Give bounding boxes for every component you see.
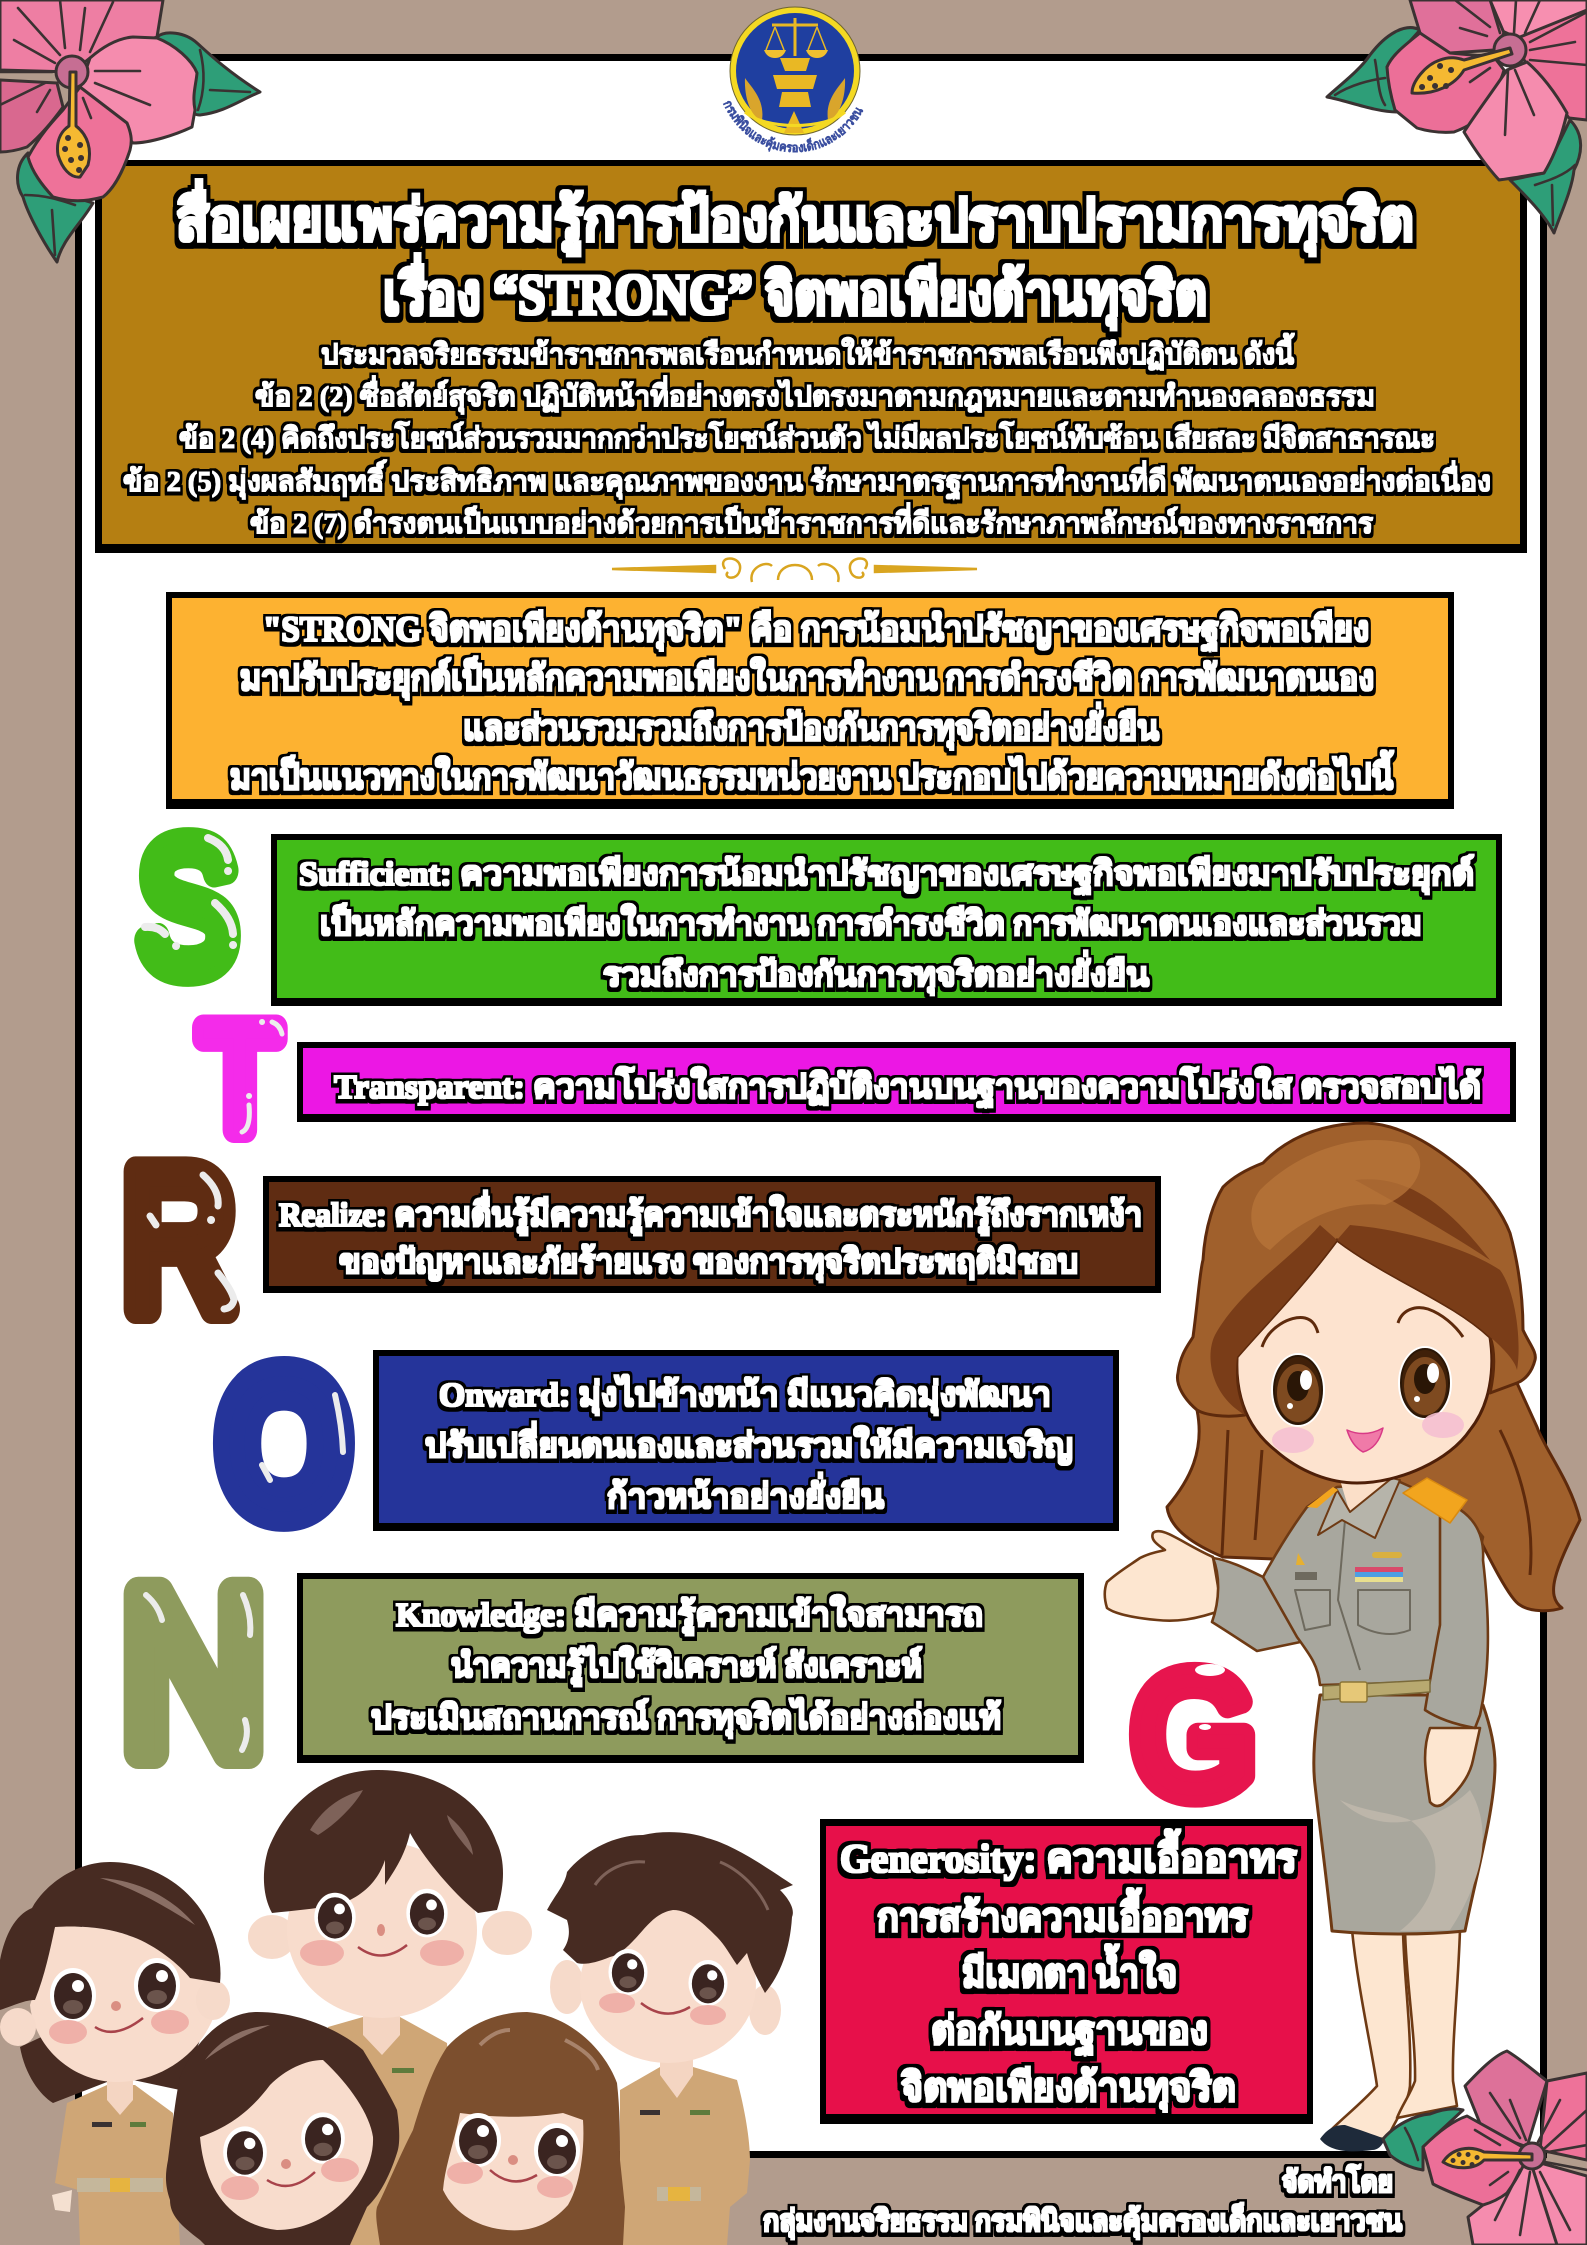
letter N: N: [122, 1544, 265, 1801]
panel: Generosity: การสร้างความเอื้ออาทร: [877, 1888, 1248, 1940]
cheeks: [1272, 1427, 1314, 1453]
panel: Generosity: มีเมตตา น้ำใจ: [962, 1944, 1177, 1996]
collar: [1318, 1478, 1400, 1538]
code of ethics text: ข้อ 2 (5) มุ่งผลสัมฤทธิ์ ประสิทธิภาพ และคุณภาพของงาน รักษามาตรฐานการทำงานที่ดี พัฒนาตนเองอย่างต่อเนื่อง: [123, 459, 1491, 500]
code of ethics text: [123, 332, 1491, 540]
panel: Sufficient: Sufficient: ความพอเพียงการน้อมนำปรัชญาของเศรษฐกิจพอเพียงมาปรับประยุกต์: [299, 854, 1474, 896]
panel: Realize: ของปัญหาและภัยร้ายแรง ของการทุจริตประพฤติมิชอบ: [339, 1244, 1078, 1283]
flower: top right: [1327, 0, 1587, 233]
panel: Transparent: [297, 1042, 1516, 1122]
credits footer: จัดทำโดย: [1282, 2163, 1393, 2199]
panel: Sufficient: รวมถึงการป้องกันการทุจริตอย่างยั่งยืน: [603, 950, 1149, 996]
panel: Knowledge: Knowledge: มีความรู้ความเข้าใจสามารถ: [396, 1594, 983, 1636]
epaulette right: [1403, 1478, 1467, 1523]
title: เรื่อง “STRONG” จิตพอเพียงต้านทุจริต: [383, 253, 1207, 331]
panel: Onward: ปรับเปลี่ยนตนเองและส่วนรวมให้มีความเจริญ: [425, 1421, 1073, 1466]
letter S: S: [139, 804, 237, 1011]
flower: bottom right: [1383, 2051, 1587, 2245]
credits footer: กลุ่มงานจริยธรรม กรมพินิจและคุ้มครองเด็กและเยาวชน: [763, 2202, 1402, 2240]
front hair: [1177, 1123, 1535, 1416]
hair shine: [1251, 1140, 1420, 1250]
neck: [1340, 1476, 1400, 1520]
letter R: R: [122, 1129, 236, 1352]
panel: Onward: ก้าวหน้าอย่างยั่งยืน: [607, 1472, 884, 1516]
panel: STRONG definition: และส่วนรวมรวมถึงการป้องกันการทุจริตอย่างยั่งยืน: [463, 702, 1159, 751]
panel: Onward: Onward: มุ่งไปข้างหน้า มีแนวคิดมุ่งพัฒนา: [439, 1374, 1051, 1416]
code of ethics text: ประมวลจริยธรรมข้าราชการพลเรือนกำหนดให้ข้าราชการพลเรือนพึงปฏิบัติตน ดังนี้: [321, 332, 1295, 371]
credits footer: [763, 2163, 1402, 2240]
shoes: [1320, 2125, 1385, 2151]
panel: Sufficient: [271, 834, 1502, 1006]
person: bottom light brown hair woman: [376, 2012, 625, 2245]
illustration: woman in uniform: [1105, 1123, 1580, 2151]
panel: STRONG definition: มาปรับประยุกต์เป็นหลักความพอเพียงในการทำงาน การดำรงชีวิต การพัฒนาตนเอง: [240, 655, 1374, 701]
title: [176, 179, 1414, 331]
letter O: O: [222, 1336, 346, 1551]
illustration: group of officials: [0, 1770, 793, 2245]
title: สื่อเผยแพร่ความรู้การป้องกันและปราบปรามการทุจริต: [176, 179, 1414, 257]
panel: Knowledge: นำความรู้ไปใช้วิเคราะห์ สังเคราะห์: [451, 1645, 922, 1687]
panel: Sufficient: เป็นหลักความพอเพียงในการทำงาน การดำรงชีวิต การพัฒนาตนเองและส่วนรวม: [320, 902, 1422, 943]
panel: Generosity: ต่อกันบนฐานของ: [931, 2008, 1208, 2057]
hair highlights: [1210, 1179, 1519, 1415]
panel: Generosity: Generosity: ความเอื้ออาทร: [840, 1829, 1298, 1881]
person: right man: [547, 1832, 793, 2245]
panel: STRONG definition: [166, 592, 1454, 809]
right sleeve and hand: [1425, 1728, 1480, 1806]
person: left woman: [0, 1862, 230, 2245]
panel: Onward: [373, 1350, 1119, 1531]
panel: STRONG definition: มาเป็นแนวทางในการพัฒนาวัฒนธรรมหน่วยงาน ประกอบไปด้วยความหมายดังต่อไปนี้: [230, 750, 1394, 797]
legs: [1326, 1930, 1410, 2139]
code of ethics text: ข้อ 2 (2) ซื่อสัตย์สุจริต ปฏิบัติหน้าที่อย่างตรงไปตรงมาตามกฎหมายและตามทำนองคลองธรรม: [255, 375, 1375, 414]
epaulette left: [1307, 1487, 1338, 1508]
ornament divider: [612, 558, 977, 582]
eyebrows: [1262, 1308, 1463, 1347]
panel: Generosity: [820, 1819, 1313, 2124]
skirt: [1314, 1695, 1495, 1934]
person: bottom dark hair woman: [166, 2012, 399, 2245]
medal ribbons: [1295, 1552, 1403, 1582]
buckle: [1340, 1682, 1367, 1702]
eyes: [1271, 1353, 1325, 1427]
panel: Generosity: จิตพอเพียงต้านทุจริต: [901, 2065, 1236, 2113]
person: top middle: [248, 1770, 532, 2245]
letter G: G: [1132, 1639, 1256, 1831]
extended sleeve: [1212, 1530, 1310, 1651]
face: [1237, 1240, 1492, 1483]
panel: STRONG definition: "STRONG จิตพอเพียงต้านทุจริต" คือ การน้อมนำปรัชญาของเศรษฐกิจพอเพียง: [263, 609, 1369, 652]
flower: top left: [0, 0, 260, 262]
logo: department emblem: [722, 6, 864, 152]
shirt details: [1295, 1520, 1410, 1670]
panel: Knowledge: ประเมินสถานการณ์ การทุจริตได้อย่างถ่องแท้: [371, 1697, 1001, 1739]
torso shirt: [1263, 1482, 1483, 1685]
code of ethics text: ข้อ 2 (4) คิดถึงประโยชน์ส่วนรวมมากกว่าประโยชน์ส่วนตัว ไม่มีผลประโยชน์ทับซ้อน เสียสละ มีจิตสาธารณะ: [179, 420, 1435, 455]
code of ethics text: ข้อ 2 (7) ดำรงตนเป็นแบบอย่างด้วยการเป็นข้าราชการที่ดีและรักษาภาพลักษณ์ของทางราชการ: [250, 502, 1373, 540]
panel: Realize: [263, 1176, 1161, 1293]
belt: [1323, 1680, 1430, 1700]
panel: Transparent: Transparent: ความโปร่งใสการปฏิบัติงานบนฐานของความโปร่งใส ตรวจสอบได้: [334, 1066, 1481, 1109]
panel: Knowledge: [297, 1573, 1084, 1763]
back hair: [1167, 1300, 1580, 1611]
extended hand: [1105, 1531, 1222, 1621]
mouth: [1347, 1428, 1383, 1452]
panel: header: [95, 160, 1527, 553]
logo: department emblem: กรมพินิจและคุ้มครองเด็กและเยาวชน: [722, 100, 864, 152]
letter T: T: [200, 995, 279, 1162]
panel: Realize: Realize: ความตื่นรู้มีความรู้ความเข้าใจและตระหนักรู้ถึงรากเหง้า: [279, 1190, 1142, 1236]
